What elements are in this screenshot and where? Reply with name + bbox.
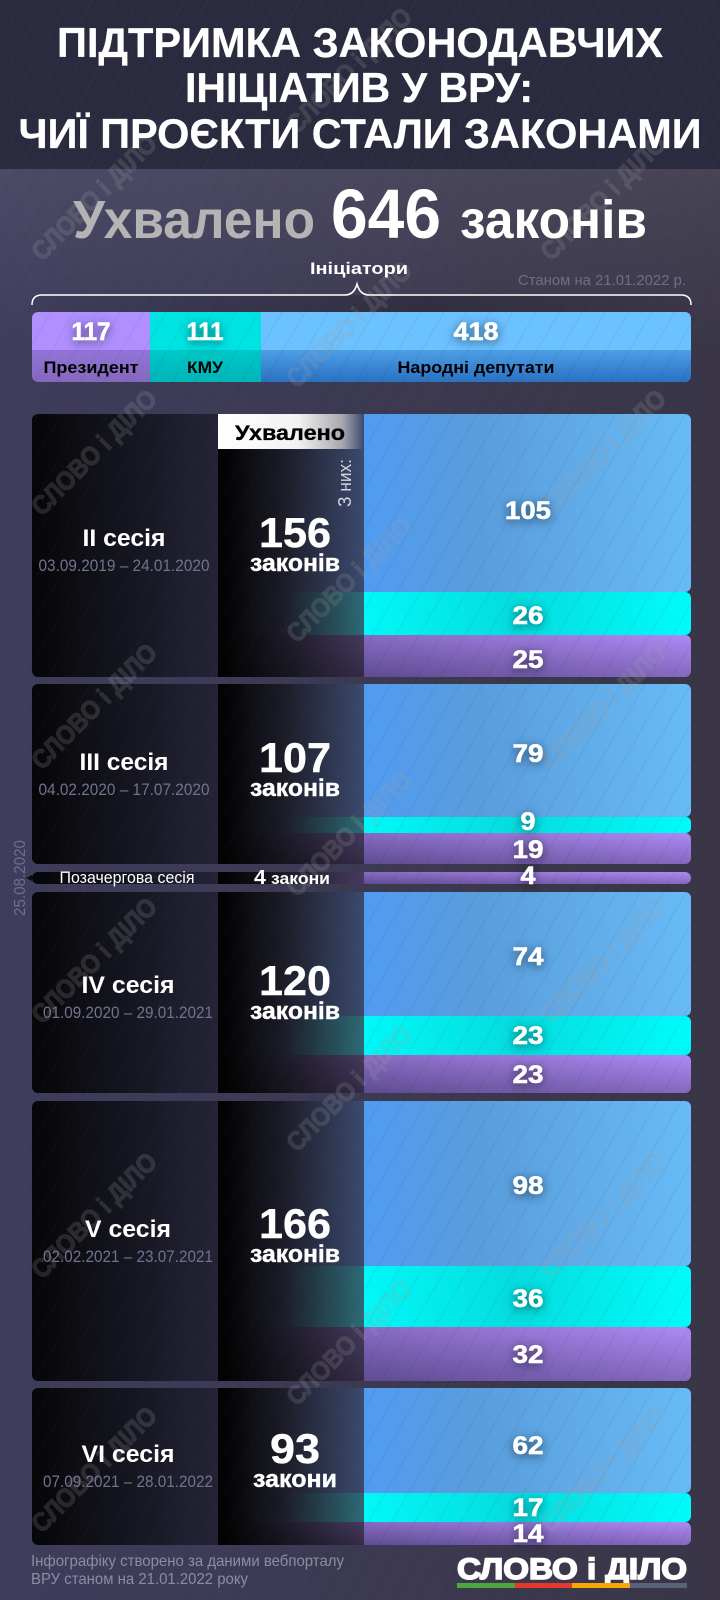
column header: adopted: Ухвалено bbox=[235, 422, 345, 445]
initiators bar labels: Президент bbox=[44, 358, 138, 377]
watermarks: СЛОВО і ДІЛО bbox=[534, 383, 672, 521]
IV session text bbox=[43, 943, 544, 1089]
title: ПІДТРИМКА ЗАКОНОДАВЧИХ bbox=[57, 19, 663, 66]
initiators bar labels: 418 bbox=[454, 318, 499, 346]
III session text: законів bbox=[250, 775, 340, 802]
watermarks: СЛОВО і ДІЛО bbox=[534, 891, 672, 1029]
II session text: 25 bbox=[512, 646, 544, 674]
V session text: 166 bbox=[259, 1200, 331, 1247]
VI session text: 17 bbox=[512, 1494, 544, 1522]
III session text bbox=[38, 734, 544, 864]
watermarks: СЛОВО і ДІЛО bbox=[25, 128, 163, 266]
III session text: 04.02.2020 – 17.07.2020 bbox=[38, 780, 210, 799]
IV session text: 01.09.2020 – 29.01.2021 bbox=[43, 1003, 213, 1022]
V session text: 36 bbox=[512, 1285, 544, 1313]
extraordinary session text: Позачергова сесія bbox=[60, 868, 194, 887]
V session text: 02.02.2021 – 23.07.2021 bbox=[43, 1247, 213, 1266]
rotated date label: 25.08.2020 bbox=[12, 840, 29, 916]
panel: V session bands bbox=[32, 1101, 691, 1381]
watermarks: СЛОВО і ДІЛО bbox=[280, 1019, 418, 1157]
total headline: 646 bbox=[331, 175, 441, 253]
watermarks: СЛОВО і ДІЛО bbox=[280, 510, 418, 648]
watermarks: СЛОВО і ДІЛО bbox=[25, 891, 163, 1029]
panel: VI session bands bbox=[32, 1388, 691, 1545]
VI session text: закони bbox=[253, 1466, 337, 1493]
II session text: 105 bbox=[505, 497, 551, 525]
VI session text: 62 bbox=[512, 1432, 544, 1460]
rotated note: of them: З них: bbox=[335, 459, 355, 507]
title bbox=[18, 19, 702, 157]
III session text: 107 bbox=[259, 734, 331, 781]
V session text: законів bbox=[250, 1241, 340, 1268]
panel: extraordinary session bands bbox=[26, 872, 691, 884]
watermarks: СЛОВО і ДІЛО bbox=[25, 1400, 163, 1538]
II session text: законів bbox=[250, 550, 340, 577]
extraordinary session text bbox=[60, 862, 536, 890]
watermarks: СЛОВО і ДІЛО bbox=[25, 637, 163, 775]
VI session text: 14 bbox=[512, 1520, 544, 1548]
VI session text: 93 bbox=[270, 1425, 320, 1472]
watermarks: СЛОВО і ДІЛО bbox=[280, 255, 418, 393]
extraordinary session text: 4 bbox=[520, 862, 536, 890]
source note: Інфографіку створено за даними вебпорталу bbox=[31, 1553, 344, 1570]
II session text: II сесія bbox=[82, 525, 166, 552]
VI session text: VI сесія bbox=[82, 1441, 174, 1468]
watermarks: СЛОВО і ДІЛО bbox=[534, 637, 672, 775]
initiators heading: Ініціатори bbox=[310, 259, 408, 278]
II session text: 26 bbox=[512, 602, 544, 630]
watermarks: СЛОВО і ДІЛО bbox=[280, 1273, 418, 1411]
VI session text: 07.09.2021 – 28.01.2022 bbox=[43, 1472, 213, 1491]
date note: Станом на 21.01.2022 р. bbox=[518, 272, 686, 289]
panel: IV session bands bbox=[32, 892, 691, 1093]
initiators stacked bar bbox=[32, 312, 691, 382]
IV session text: 74 bbox=[512, 943, 544, 971]
title: ЧИЇ ПРОЄКТИ СТАЛИ ЗАКОНАМИ bbox=[18, 110, 702, 157]
initiators bar labels: 111 bbox=[186, 318, 224, 346]
II session text bbox=[38, 497, 551, 674]
initiators bar labels: Народні депутати bbox=[398, 358, 554, 377]
V session text: V сесія bbox=[85, 1216, 171, 1243]
initiators bar labels bbox=[44, 318, 554, 377]
source note bbox=[31, 1553, 344, 1588]
total headline bbox=[73, 175, 647, 253]
IV session text: 23 bbox=[512, 1022, 544, 1050]
III session text: 79 bbox=[512, 740, 544, 768]
II session text: 156 bbox=[259, 509, 331, 556]
III session text: 19 bbox=[512, 836, 544, 864]
total headline: Ухвалено bbox=[73, 190, 315, 250]
initiators bar labels: КМУ bbox=[187, 358, 223, 377]
IV session text: IV сесія bbox=[82, 972, 174, 999]
column header: adopted bbox=[218, 414, 364, 449]
IV session text: 23 bbox=[512, 1061, 544, 1089]
total headline: законів bbox=[460, 190, 647, 250]
V session text bbox=[43, 1172, 544, 1369]
initiators bar labels: 117 bbox=[72, 318, 110, 346]
III session text: 9 bbox=[520, 808, 536, 836]
V session text: 98 bbox=[512, 1172, 544, 1200]
watermarks: СЛОВО і ДІЛО bbox=[25, 383, 163, 521]
logo: СЛОВО і ДІЛО bbox=[457, 1553, 687, 1586]
V session text: 32 bbox=[512, 1341, 544, 1369]
panel: II session bands bbox=[32, 414, 691, 677]
watermarks: СЛОВО і ДІЛО bbox=[280, 764, 418, 902]
title: ІНІЦІАТИВ У ВРУ: bbox=[185, 64, 533, 111]
watermarks: СЛОВО і ДІЛО bbox=[534, 1400, 672, 1538]
brace bbox=[32, 284, 691, 305]
watermarks: СЛОВО і ДІЛО bbox=[534, 1146, 672, 1284]
extraordinary session text: 4 bbox=[254, 867, 267, 889]
source note: ВРУ станом на 21.01.2022 року bbox=[31, 1571, 248, 1588]
extraordinary session text: закони bbox=[271, 869, 330, 888]
III session text: III сесія bbox=[80, 749, 168, 776]
IV session text: законів bbox=[250, 998, 340, 1025]
watermarks: СЛОВО і ДІЛО bbox=[25, 1146, 163, 1284]
panel: III session bands bbox=[32, 684, 691, 864]
watermarks: СЛОВО і ДІЛО bbox=[534, 128, 672, 266]
II session text: 03.09.2019 – 24.01.2020 bbox=[38, 556, 210, 575]
header band bbox=[0, 0, 720, 169]
VI session text bbox=[43, 1425, 544, 1548]
IV session text: 120 bbox=[259, 957, 331, 1004]
